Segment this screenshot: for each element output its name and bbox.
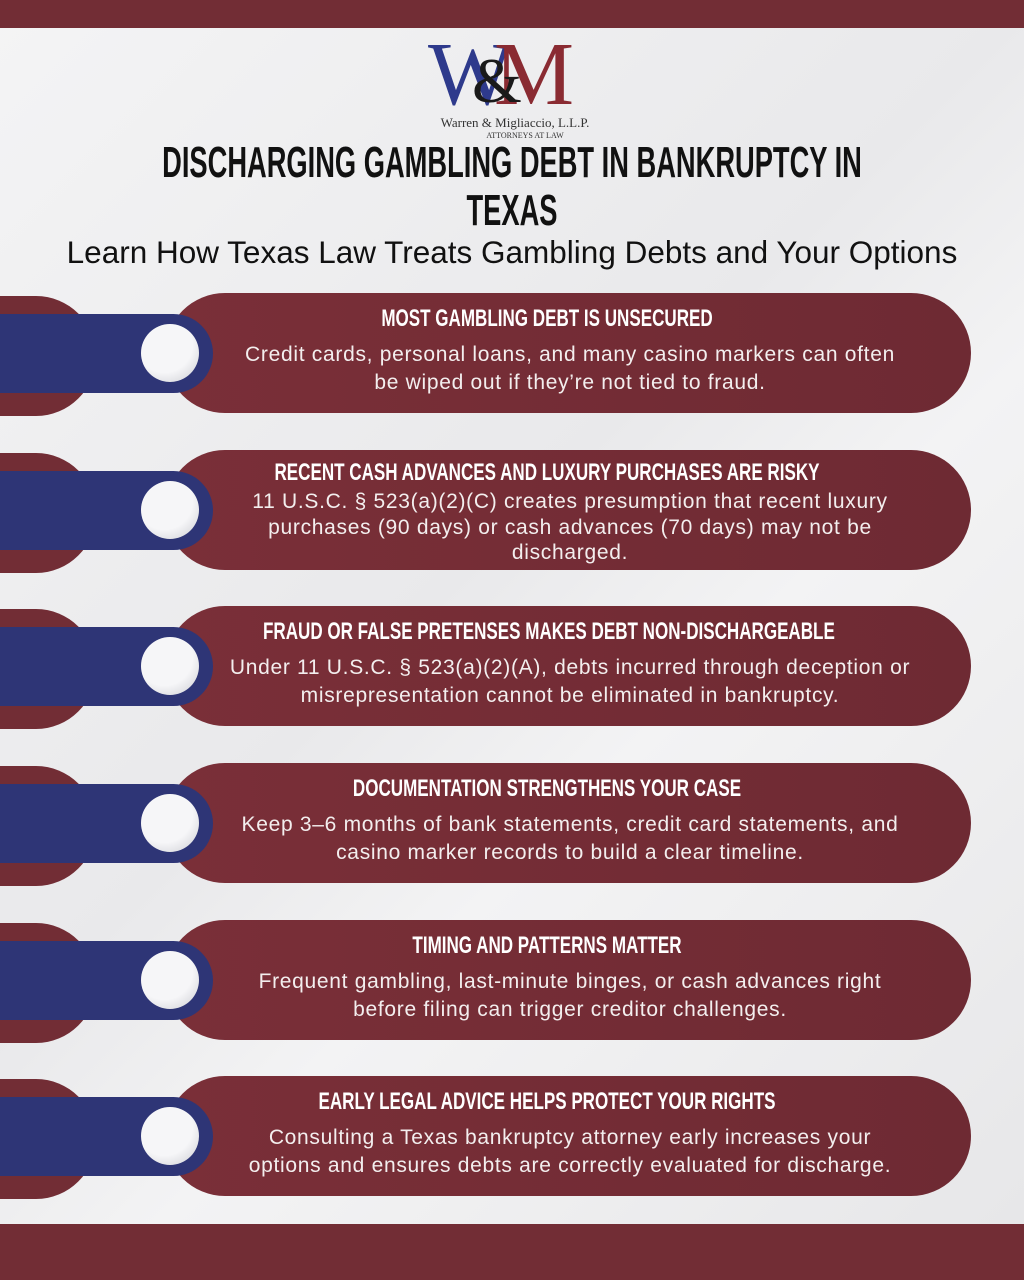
body 3: misrepresentation cannot be eliminated in bankruptcy. xyxy=(301,684,839,707)
row 4 xyxy=(0,763,971,886)
title: TEXAS xyxy=(467,186,557,235)
body 5: before filing can trigger creditor challenges. xyxy=(353,998,787,1021)
body 3 xyxy=(230,656,910,707)
row 5 xyxy=(0,920,971,1043)
body 5: Frequent gambling, last-minute binges, or cash advances right xyxy=(259,970,881,993)
title xyxy=(162,138,862,235)
body 1: be wiped out if they’re not tied to fraud. xyxy=(374,371,766,394)
title: DISCHARGING GAMBLING DEBT IN BANKRUPTCY IN xyxy=(162,138,862,187)
body 4 xyxy=(242,813,898,864)
row 2 xyxy=(0,450,971,573)
body 6: Consulting a Texas bankruptcy attorney early increases your xyxy=(269,1126,871,1149)
body 2: 11 U.S.C. § 523(a)(2)(C) creates presumption that recent luxury xyxy=(252,490,888,513)
heading 3: FRAUD OR FALSE PRETENSES MAKES DEBT NON-DISCHARGEABLE xyxy=(263,618,835,645)
row 3 xyxy=(0,606,971,729)
body 2 xyxy=(252,490,888,564)
row 1 xyxy=(0,293,971,416)
heading 1: MOST GAMBLING DEBT IS UNSECURED xyxy=(381,305,713,332)
subtitle: Learn How Texas Law Treats Gambling Debts and Your Options xyxy=(67,234,957,270)
heading 2: RECENT CASH ADVANCES AND LUXURY PURCHASES ARE RISKY xyxy=(274,459,820,486)
bottom bar xyxy=(0,1224,1024,1280)
body 2: discharged. xyxy=(512,541,628,564)
body 1 xyxy=(245,343,895,394)
body 3: Under 11 U.S.C. § 523(a)(2)(A), debts incurred through deception or xyxy=(230,656,910,679)
row 6 xyxy=(0,1076,971,1199)
logo: Warren & Migliaccio, L.L.P. xyxy=(441,115,589,130)
body 4: Keep 3–6 months of bank statements, credit card statements, and xyxy=(242,813,898,836)
body 6 xyxy=(249,1126,891,1177)
heading 4: DOCUMENTATION STRENGTHENS YOUR CASE xyxy=(353,775,741,802)
body 1: Credit cards, personal loans, and many casino markers can often xyxy=(245,343,895,366)
logo xyxy=(428,32,589,140)
body 5 xyxy=(259,970,881,1021)
heading 6: EARLY LEGAL ADVICE HELPS PROTECT YOUR RIGHTS xyxy=(319,1088,775,1115)
heading 5: TIMING AND PATTERNS MATTER xyxy=(412,932,682,959)
body 2: purchases (90 days) or cash advances (70 days) may not be xyxy=(268,516,872,538)
body 6: options and ensures debts are correctly evaluated for discharge. xyxy=(249,1154,891,1177)
top bar xyxy=(0,0,1024,28)
body 4: casino marker records to build a clear timeline. xyxy=(336,841,804,864)
logo: ATTORNEYS AT LAW xyxy=(486,131,564,140)
